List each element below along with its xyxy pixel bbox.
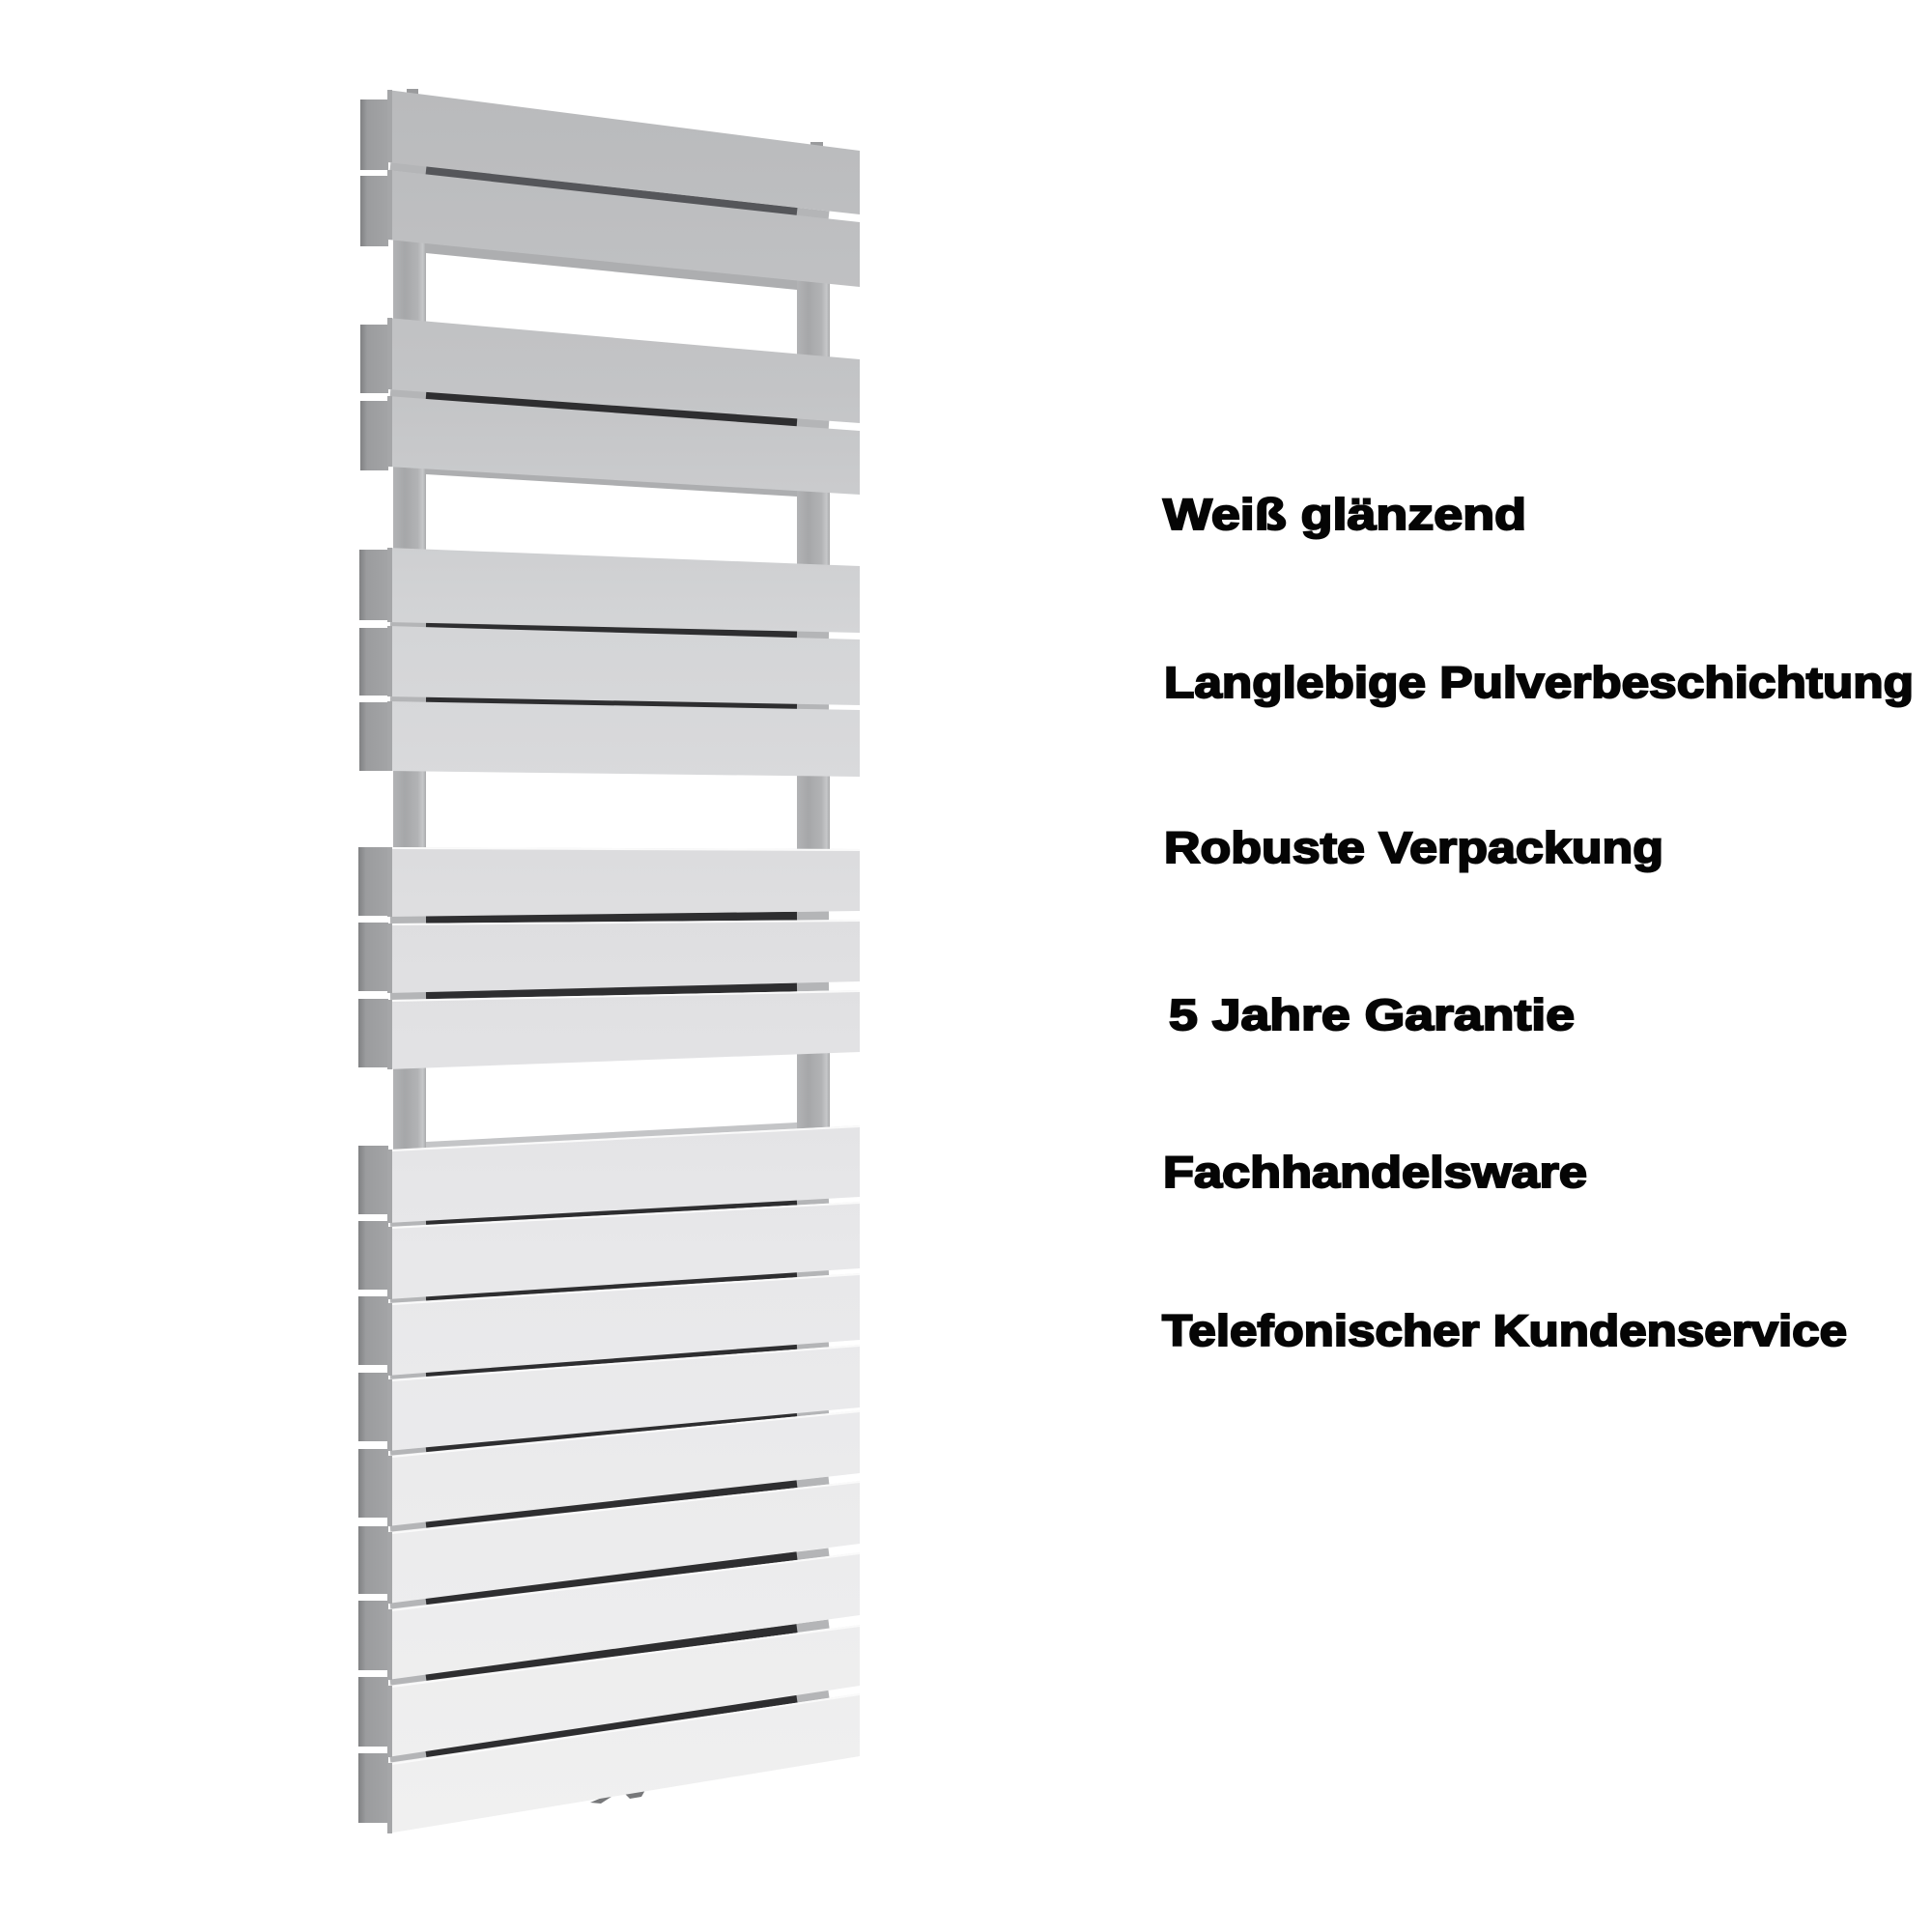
feature: Telefonischer Kundenservice: Telefonischer Kundenservice (1162, 1306, 1847, 1355)
feature: Robuste Verpackung: Robuste Verpackung (1164, 823, 1663, 872)
back brackets (358, 99, 388, 1823)
slat gaps (390, 166, 829, 1760)
rear rails (426, 240, 797, 1157)
radiator (358, 89, 860, 1833)
vertical pipes (393, 232, 830, 1154)
top knobs (407, 89, 823, 148)
feature: Fachhandelsware: Fachhandelsware (1163, 1148, 1587, 1197)
slats (387, 90, 860, 1833)
slat top highlights (392, 848, 860, 1764)
bottom valves (590, 1790, 645, 1804)
feature: 5 Jahre Garantie: 5 Jahre Garantie (1169, 990, 1575, 1039)
feature: Weiß glänzend: Weiß glänzend (1163, 490, 1526, 539)
feature list (1162, 490, 1914, 1355)
slat left edges (387, 90, 392, 1833)
feature: Langlebige Pulverbeschichtung: Langlebige Pulverbeschichtung (1164, 658, 1914, 707)
